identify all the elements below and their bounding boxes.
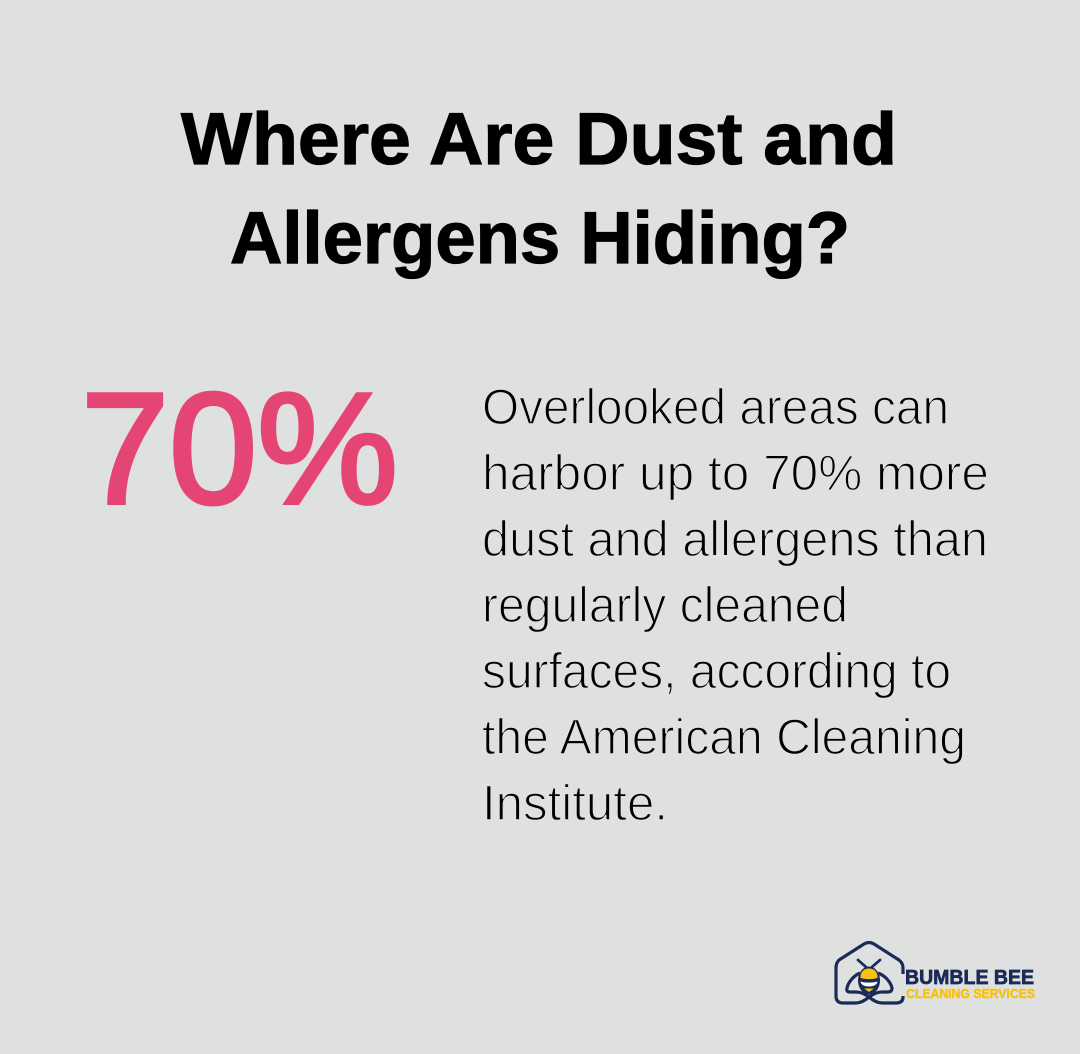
description text: the American Cleaning <box>482 709 966 765</box>
big statistic: 70%: 70% <box>81 361 398 537</box>
icon: house with bee <box>836 942 903 1003</box>
description text: dust and allergens than <box>482 511 988 567</box>
description text: Institute. <box>482 775 668 831</box>
description text: Overlooked areas can <box>482 379 949 435</box>
description text: surfaces, according to <box>482 643 951 699</box>
title <box>181 99 897 279</box>
description text: regularly cleaned <box>482 577 848 633</box>
description text: harbor up to 70% more <box>482 445 989 501</box>
logo: Bumble Bee Cleaning Services <box>836 942 1035 1003</box>
logo tagline: CLEANING SERVICES <box>906 986 1035 1001</box>
description text <box>482 379 989 831</box>
title: Allergens Hiding? <box>230 198 850 279</box>
logo name: BUMBLE BEE <box>905 967 1034 989</box>
title: Where Are Dust and <box>181 99 897 180</box>
